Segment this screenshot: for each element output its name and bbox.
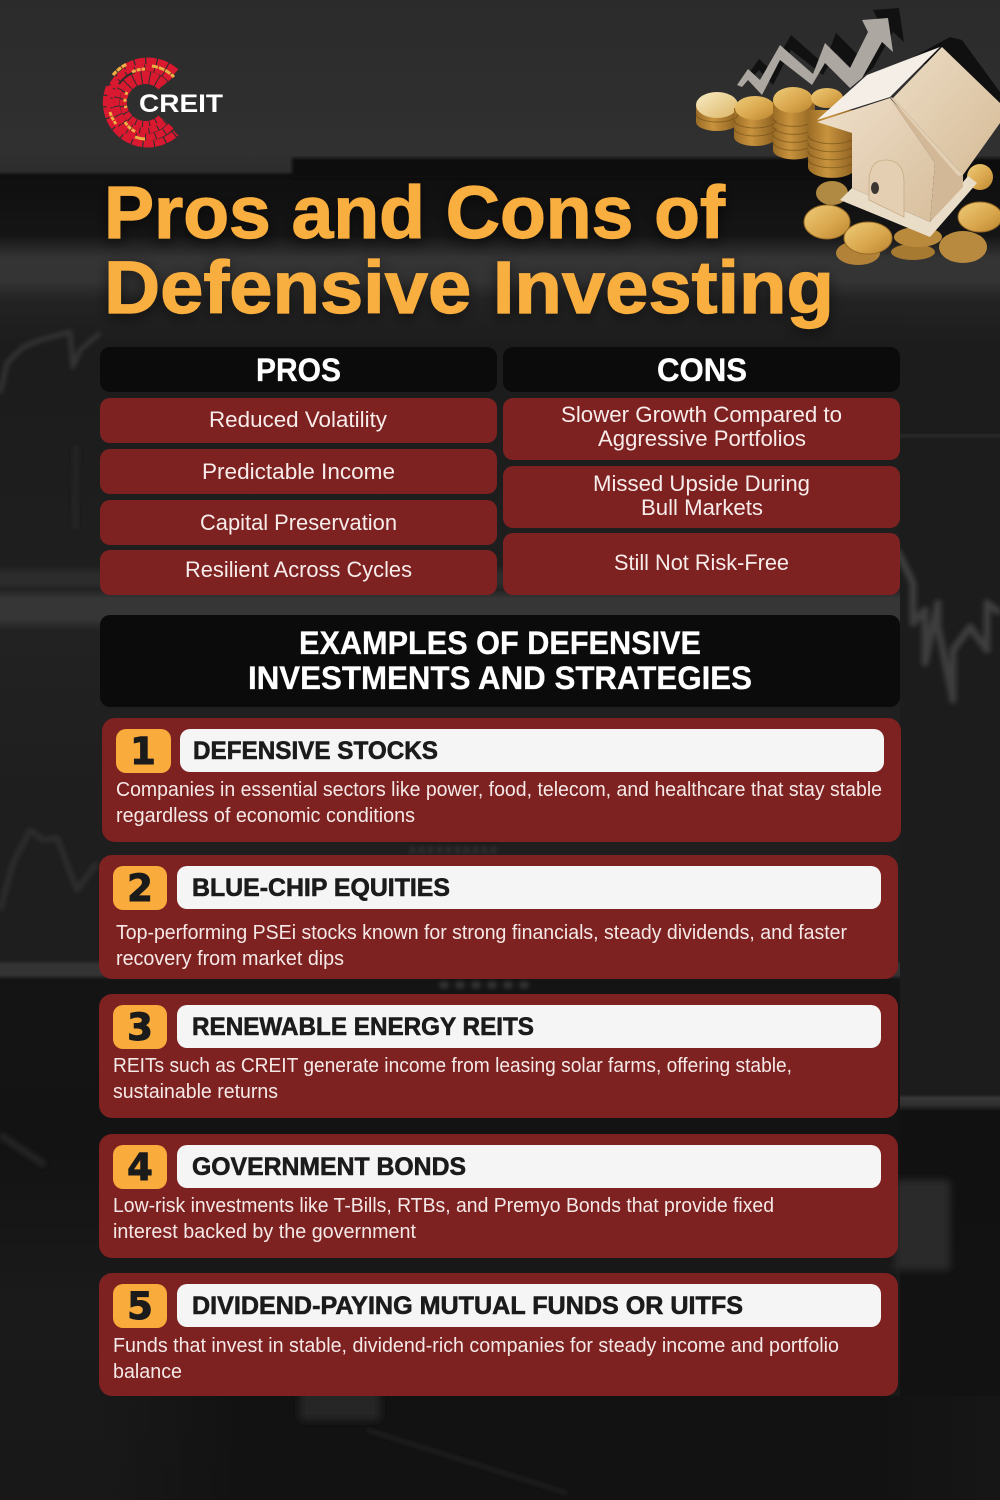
con: missed upside: Missed Upside During — [593, 471, 810, 496]
pro: capital preservation — [100, 500, 497, 545]
description — [116, 922, 847, 970]
number 5 — [113, 1284, 167, 1328]
card 2: blue-chip equities — [99, 855, 898, 979]
rising arrow — [737, 18, 893, 95]
title bar — [180, 729, 884, 772]
pro: resilient across cycles: Resilient Across Cycles — [185, 557, 412, 582]
number 1: 1 — [130, 730, 156, 773]
con: slower growth: Slower Growth Compared to — [561, 402, 842, 427]
description — [113, 1195, 774, 1243]
pro: reduced volatility: Reduced Volatility — [209, 407, 387, 432]
title bar: BLUE-CHIP EQUITIES — [192, 874, 450, 902]
number 3: 3 — [127, 1006, 153, 1049]
wooden house — [817, 47, 1000, 237]
con: slower growth: Aggressive Portfolios — [598, 426, 806, 451]
description: regardless of economic conditions — [116, 805, 415, 827]
description: Low-risk investments like T-Bills, RTBs, and Premyo Bonds that provide fixed — [113, 1195, 774, 1217]
title — [104, 171, 834, 329]
title bar: DIVIDEND-PAYING MUTUAL FUNDS OR UITFS — [192, 1292, 743, 1320]
cons heading — [503, 347, 900, 392]
card 3: renewable energy reits — [99, 994, 898, 1118]
title bar: RENEWABLE ENERGY REITS — [192, 1013, 534, 1041]
description: Top-performing PSEi stocks known for strong financials, steady dividends, and faster — [116, 922, 847, 944]
pro: predictable income: Predictable Income — [202, 459, 395, 484]
pro: capital preservation: Capital Preservation — [200, 510, 397, 535]
description: Funds that invest in stable, dividend-rich companies for steady income and portfolio — [113, 1335, 839, 1357]
description — [116, 779, 882, 827]
title bar — [177, 866, 881, 909]
title bar: GOVERNMENT BONDS — [192, 1153, 466, 1181]
card 1: defensive stocks — [102, 718, 901, 842]
number 2: 2 — [127, 867, 153, 910]
description — [113, 1055, 792, 1103]
card 4: government bonds — [99, 1134, 898, 1258]
con: missed upside: Bull Markets — [641, 495, 763, 520]
pros heading — [100, 347, 497, 392]
con: still not risk-free — [503, 533, 900, 595]
logo wordmark: CREIT — [139, 90, 223, 118]
description: interest backed by the government — [113, 1221, 416, 1243]
number 3 — [113, 1005, 167, 1049]
pro: reduced volatility — [100, 398, 497, 443]
number 4 — [113, 1145, 167, 1189]
number 5: 5 — [127, 1285, 153, 1328]
heading: examples: INVESTMENTS AND STRATEGIES — [248, 660, 752, 696]
heading: examples: EXAMPLES OF DEFENSIVE — [299, 625, 701, 661]
number 4: 4 — [127, 1146, 153, 1189]
pro: predictable income — [100, 449, 497, 494]
title bar — [177, 1284, 881, 1327]
illustration: wooden house on gold coins with rising arrow — [696, 8, 1000, 265]
logo mark — [106, 61, 176, 144]
loose coins — [804, 164, 1000, 265]
title bar — [177, 1145, 881, 1188]
pro: resilient across cycles — [100, 550, 497, 595]
description: REITs such as CREIT generate income from leasing solar farms, offering stable, — [113, 1055, 792, 1077]
title: Pros and Cons of — [104, 171, 725, 254]
panel: pros — [100, 347, 497, 595]
number 1 — [116, 729, 171, 773]
description: Companies in essential sectors like power, food, telecom, and healthcare that stay stable — [116, 779, 882, 801]
description: recovery from market dips — [116, 948, 344, 970]
description: sustainable returns — [113, 1081, 278, 1103]
title: Defensive Investing — [104, 246, 834, 329]
title bar: DEFENSIVE STOCKS — [193, 737, 438, 765]
heading: examples — [100, 615, 900, 707]
number 2 — [113, 866, 167, 910]
pros heading: PROS — [256, 352, 341, 388]
con: still not risk-free: Still Not Risk-Free — [614, 550, 789, 575]
con: missed upside — [503, 466, 900, 528]
panel: cons — [503, 347, 900, 595]
cons heading: CONS — [657, 352, 747, 388]
house shadow — [880, 37, 1000, 112]
title bar — [177, 1005, 881, 1048]
card 5: dividend-paying funds — [99, 1273, 898, 1396]
description: balance — [113, 1361, 182, 1383]
description — [113, 1335, 839, 1383]
rising arrow shadow — [748, 8, 904, 85]
logo: CREIT — [106, 61, 223, 144]
coin stacks — [696, 87, 856, 178]
con: slower growth — [503, 398, 900, 460]
